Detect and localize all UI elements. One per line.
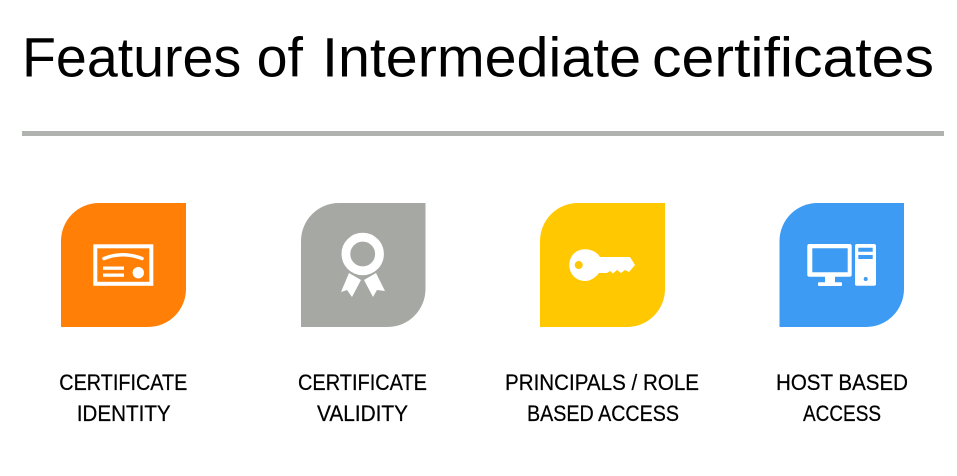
label: HOST BASED bbox=[776, 370, 908, 395]
title: Features of bbox=[22, 26, 303, 88]
label: VALIDITY bbox=[317, 401, 408, 426]
tile: blue bbox=[780, 203, 904, 327]
icon: certificate bbox=[95, 246, 151, 284]
icon: key bbox=[569, 249, 635, 281]
label: IDENTITY bbox=[77, 401, 171, 426]
panel: certificate validity bbox=[298, 203, 427, 426]
label: PRINCIPALS / ROLE bbox=[505, 370, 699, 395]
label: ACCESS bbox=[803, 401, 881, 426]
panel: principals / role based access bbox=[505, 203, 699, 426]
label: BASED ACCESS bbox=[527, 401, 679, 426]
label: CERTIFICATE bbox=[59, 370, 187, 395]
panel: certificate identity bbox=[59, 203, 187, 426]
tile: orange bbox=[61, 203, 186, 327]
title: Intermediate bbox=[322, 26, 641, 88]
icon: rosette bbox=[341, 237, 385, 297]
label: CERTIFICATE bbox=[298, 370, 427, 395]
icon: computer bbox=[807, 244, 876, 286]
title: certificates bbox=[652, 26, 934, 88]
tile: yellow bbox=[540, 203, 665, 327]
panel: host based access bbox=[776, 203, 908, 426]
tile: grey bbox=[301, 203, 426, 327]
